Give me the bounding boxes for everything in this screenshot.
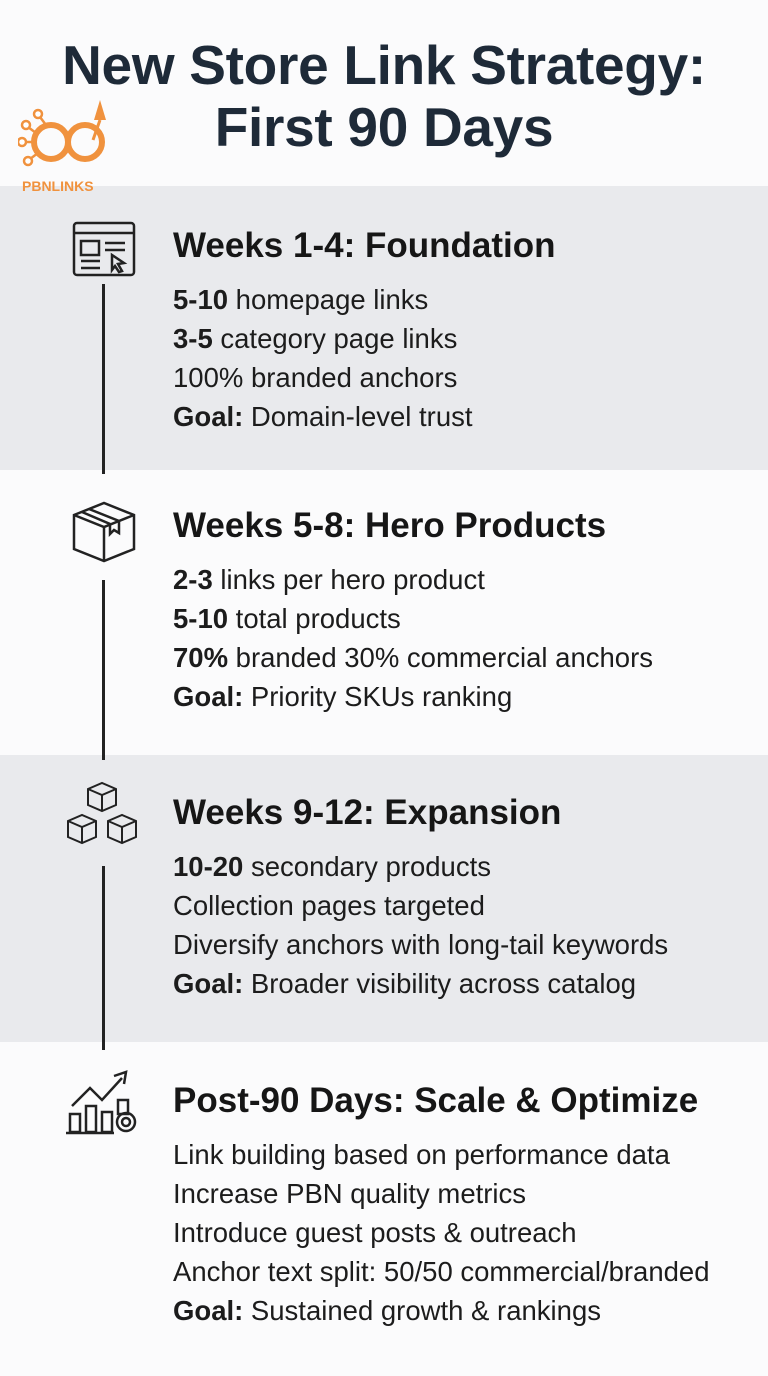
title: First 90 Days: [215, 96, 553, 158]
panel: weeks 9-12: 10-20 secondary products: [173, 851, 491, 882]
panel: weeks 9-12: Weeks 9-12: Expansion: [173, 793, 561, 832]
logo: PBNLINKS: PBNLINKS: [22, 178, 94, 194]
panel: post-90 days: Anchor text split: 50/50 commercial/branded: [173, 1256, 710, 1287]
panel: weeks 5-8: Goal: Priority SKUs ranking: [173, 681, 512, 712]
panel: post-90 days: Introduce guest posts & outreach: [173, 1217, 577, 1248]
panel: weeks 9-12: Goal: Broader visibility across catalog: [173, 968, 636, 999]
panel: post-90 days: [173, 1081, 710, 1326]
title: [62, 34, 706, 158]
panel: weeks 9-12: Collection pages targeted: [173, 890, 485, 921]
icon: browser: [72, 222, 136, 276]
title: New Store Link Strategy:: [62, 34, 706, 96]
panel: weeks 1-4: Weeks 1-4: Foundation: [173, 226, 555, 265]
panel: weeks 9-12: Diversify anchors with long-tail keywords: [173, 929, 668, 960]
panel: post-90 days: Increase PBN quality metrics: [173, 1178, 526, 1209]
panel: weeks 1-4: 5-10 homepage links: [173, 284, 428, 315]
panel: weeks 5-8: 70% branded 30% commercial anchors: [173, 642, 653, 673]
panel: weeks 1-4: 3-5 category page links: [173, 323, 457, 354]
panel: weeks 1-4: Goal: Domain-level trust: [173, 401, 473, 432]
icon: boxes: [67, 782, 137, 844]
icon: growth chart with gear: [66, 1070, 136, 1134]
panel: weeks 5-8: 2-3 links per hero product: [173, 564, 485, 595]
panel: weeks 5-8: [173, 506, 653, 712]
timeline line 1: [102, 284, 105, 474]
panel: post-90 days: Goal: Sustained growth & rankings: [173, 1295, 601, 1326]
logo: PBNLINKS: [18, 100, 106, 194]
panel: post-90 days: Link building based on performance data: [173, 1139, 670, 1170]
panel: weeks 5-8: Weeks 5-8: Hero Products: [173, 506, 606, 545]
panel: weeks 1-4: 100% branded anchors: [173, 362, 457, 393]
panel: post-90 days: Post-90 Days: Scale & Optimize: [173, 1081, 698, 1120]
timeline line 3: [102, 866, 105, 1050]
icon: box: [72, 502, 136, 562]
panel: weeks 9-12: [173, 793, 668, 999]
panel: weeks 1-4: [173, 226, 555, 432]
panel: weeks 5-8: 5-10 total products: [173, 603, 401, 634]
timeline line 2: [102, 580, 105, 760]
